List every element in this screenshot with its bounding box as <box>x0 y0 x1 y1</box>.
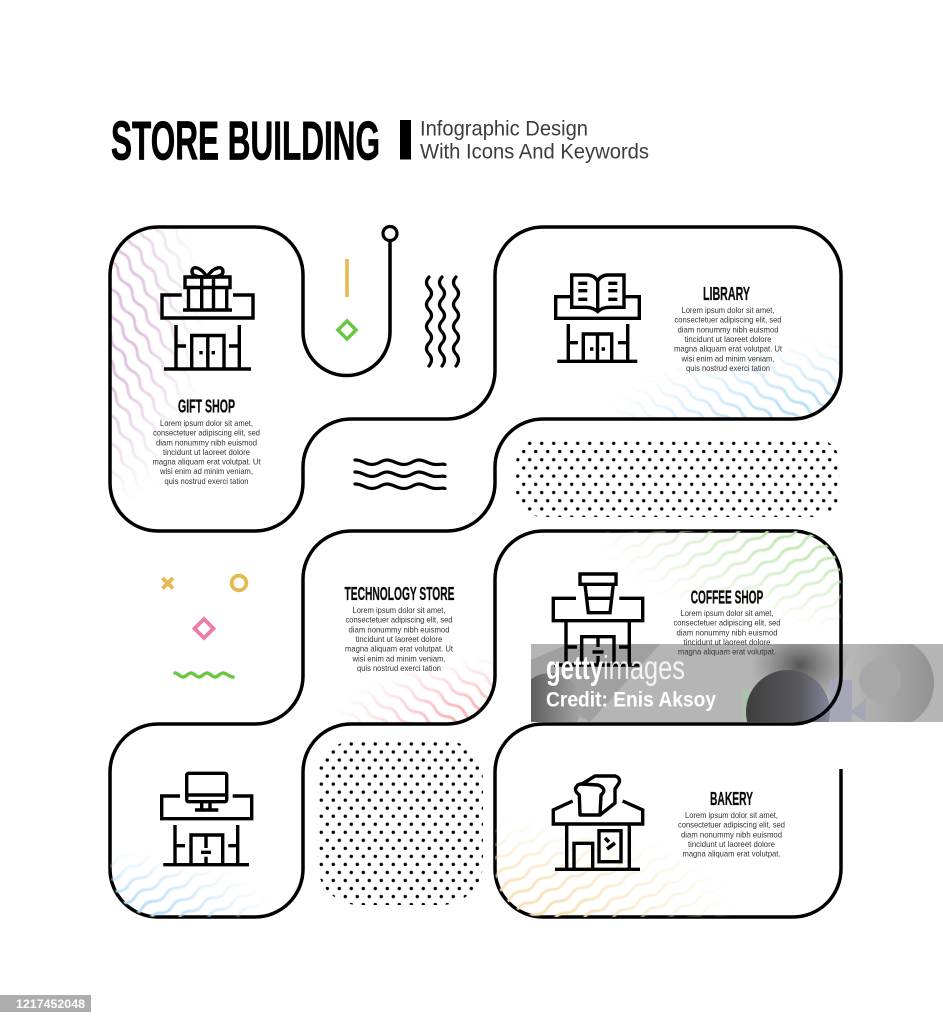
body text: gift shop: quis nostrud exerci tation <box>164 476 249 486</box>
accent: yellow ring <box>232 576 246 590</box>
body text: gift shop: Lorem ipsum dolor sit amet, <box>160 418 253 428</box>
panel: technology store text <box>344 584 454 673</box>
body text: coffee shop: consectetuer adipiscing elit, sed <box>674 618 781 628</box>
image id label <box>0 995 91 1012</box>
heading: gift shop: GIFT SHOP <box>178 397 235 417</box>
body text: coffee shop <box>674 608 781 657</box>
dot pattern: square block <box>317 739 483 905</box>
body text: technology store <box>345 605 454 673</box>
title divider bar <box>400 120 411 160</box>
accent: green wave <box>175 673 233 677</box>
accent: green diamond <box>338 321 356 339</box>
title: STORE BUILDING <box>111 110 380 172</box>
body text: library: Lorem ipsum dolor sit amet, <box>682 305 774 315</box>
body text: bakery: Lorem ipsum dolor sit amet, <box>685 810 778 820</box>
icon: gift shop <box>162 268 253 369</box>
accent: yellow cross <box>162 578 173 588</box>
body text: coffee shop: Lorem ipsum dolor sit amet, <box>680 608 774 618</box>
body text: gift shop: diam nonummy nibh euismod <box>156 437 257 447</box>
subtitle: Infographic Design <box>420 118 588 140</box>
wave texture: bakery <box>495 826 730 917</box>
body text: technology store: consectetuer adipiscing elit, sed <box>346 615 453 625</box>
body text: bakery <box>678 810 785 859</box>
body text: bakery: diam nonummy nibh euismod <box>681 829 782 839</box>
panel: library <box>556 275 783 373</box>
watermark text: getty <box>546 649 603 686</box>
accent: horizontal waves <box>355 460 445 488</box>
wave texture: coffee shop <box>605 531 841 622</box>
heading: technology store: TECHNOLOGY STORE <box>344 584 454 604</box>
watermark text: images <box>603 649 685 686</box>
body text: technology store: Lorem ipsum dolor sit amet, <box>352 605 446 615</box>
body text: gift shop: wisi enim ad minim veniam, <box>159 466 253 476</box>
body text: bakery: tincidunt ut laoreet dolore <box>688 839 775 849</box>
icon: technology store <box>162 773 252 865</box>
body text: technology store: quis nostrud exerci tation <box>357 663 441 673</box>
icon: library <box>556 275 639 361</box>
panel: technology store icon <box>110 772 271 917</box>
heading: library: LIBRARY <box>703 284 750 304</box>
heading: coffee shop: COFFEE SHOP <box>691 587 763 607</box>
body text: library: wisi enim ad minim veniam, <box>681 353 774 363</box>
body text: library: consectetuer adipiscing elit, sed <box>674 315 782 325</box>
body text: technology store: diam nonummy nibh euismod <box>348 624 450 634</box>
dot pattern: horizontal band <box>516 438 840 517</box>
panel: coffee shop <box>553 528 845 665</box>
wave texture: technology store icon panel <box>110 856 271 917</box>
watermark text: Credit: Enis Aksoy <box>546 689 716 712</box>
body text: library: diam nonummy nibh euismod <box>678 324 779 334</box>
watermark text <box>546 649 716 712</box>
accent: pink diamond <box>194 619 214 638</box>
flow line start node <box>383 226 397 240</box>
wave texture: technology store panel <box>346 661 493 722</box>
wave texture: gift shop panel <box>112 229 196 492</box>
subtitle: With Icons And Keywords <box>420 140 649 163</box>
image id label: 1217452048 <box>16 999 86 1011</box>
body text: technology store: tincidunt ut laoreet dolore <box>356 634 443 644</box>
wave texture: library panel <box>622 346 840 418</box>
body text: gift shop: tincidunt ut laoreet dolore <box>163 447 250 457</box>
body text: technology store: wisi enim ad minim veniam, <box>352 653 446 663</box>
panel: bakery <box>493 776 785 920</box>
icon: coffee shop <box>553 574 643 665</box>
flow line connecting panels <box>110 227 841 917</box>
body text: gift shop: consectetuer adipiscing elit, sed <box>153 428 260 438</box>
icon: bakery <box>553 776 643 869</box>
body text: library: magna aliquam erat volutpat. Ut <box>674 344 783 354</box>
body text: coffee shop: diam nonummy nibh euismod <box>676 627 778 637</box>
body text: gift shop <box>152 418 261 486</box>
watermark panel <box>531 644 943 722</box>
accent: vertical waves <box>426 277 458 366</box>
body text: library <box>674 305 783 373</box>
body text: bakery: consectetuer adipiscing elit, sed <box>678 820 785 830</box>
subtitle <box>420 118 649 163</box>
panel: gift shop <box>152 268 261 486</box>
body text: bakery: magna aliquam erat volutpat. <box>682 849 780 859</box>
body text: gift shop: magna aliquam erat volutpat. Ut <box>152 457 261 467</box>
heading: bakery: BAKERY <box>710 789 753 809</box>
body text: library: quis nostrud exerci tation <box>686 363 770 373</box>
body text: library: tincidunt ut laoreet dolore <box>684 334 772 344</box>
body text: technology store: magna aliquam erat volutpat. Ut <box>345 644 454 654</box>
body text: coffee shop: tincidunt ut laoreet dolore <box>684 637 771 647</box>
body text: coffee shop: magna aliquam erat volutpat. <box>678 647 776 657</box>
accent: yellow bar <box>345 259 349 297</box>
